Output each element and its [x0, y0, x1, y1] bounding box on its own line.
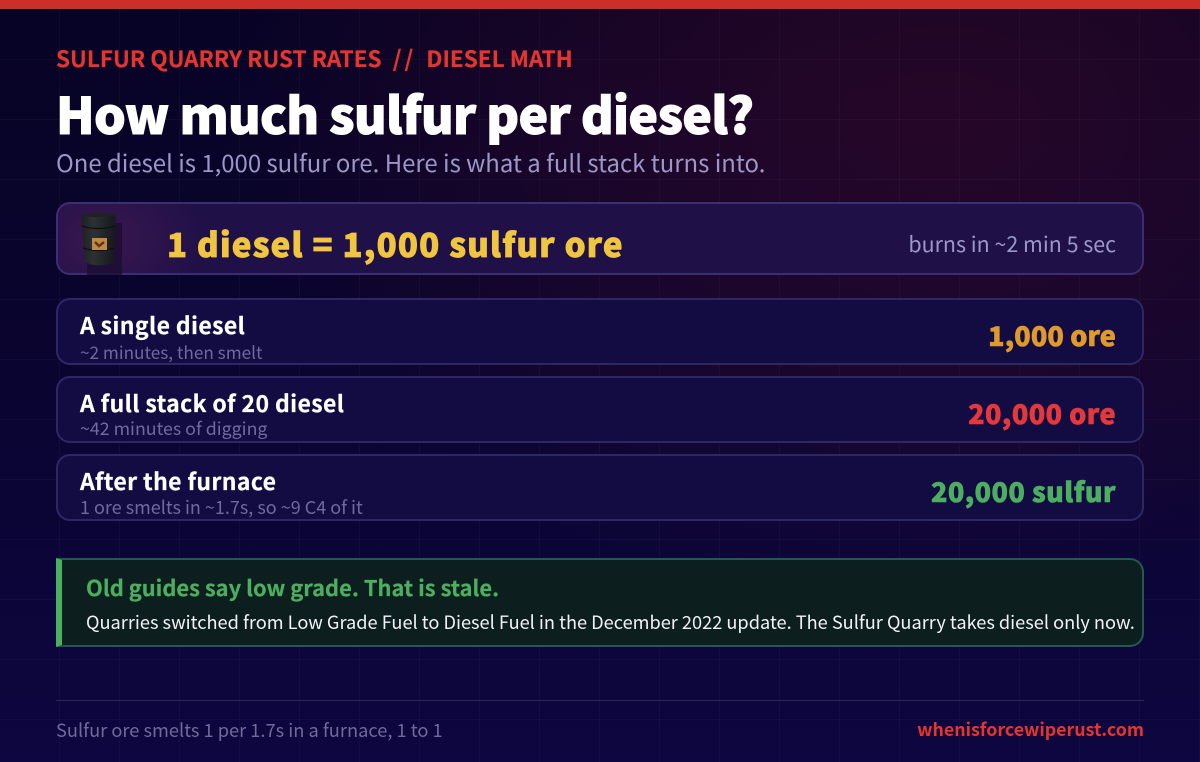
burn time note: burns in ~2 min 5 sec [908, 228, 1116, 259]
row subtext: ~42 minutes of digging [80, 415, 267, 441]
footer site link text: whenisforcewiperust.com [917, 716, 1144, 742]
row title: A single diesel [80, 307, 245, 341]
row value: 20,000 ore [968, 393, 1116, 432]
title: How much sulfur per diesel? [56, 77, 753, 149]
subtitle: One diesel is 1,000 sulfur ore. Here is what a full stack turns into. [56, 144, 765, 179]
row subtext: 1 ore smelts in ~1.7s, so ~9 C4 of it [80, 494, 363, 520]
callout: stale guides [56, 558, 1144, 647]
row subtext: ~2 minutes, then smelt [80, 339, 263, 364]
hero equation: 1 diesel = 1,000 sulfur ore [167, 219, 624, 267]
footer note: Sulfur ore smelts 1 per 1.7s in a furnace, 1 to 1 [56, 717, 443, 743]
top accent bar [0, 0, 1200, 9]
panel: hero diesel equation [56, 202, 1144, 275]
row value: 1,000 ore [988, 315, 1116, 354]
panel: a single diesel [56, 298, 1144, 365]
panel: full stack [56, 376, 1144, 443]
icon: diesel barrel [81, 213, 122, 275]
row title: After the furnace [80, 463, 276, 497]
panel: after the furnace [56, 454, 1144, 521]
callout body: Quarries switched from Low Grade Fuel to Diesel Fuel in the December 2022 update. The Sulfur Quarry takes diesel only now. [86, 609, 1135, 635]
callout heading: Old guides say low grade. That is stale. [86, 572, 499, 603]
row value: 20,000 sulfur [931, 471, 1116, 510]
eyebrow label: SULFUR QUARRY RUST RATES // DIESEL MATH [56, 42, 573, 74]
row title: A full stack of 20 diesel [80, 385, 344, 419]
